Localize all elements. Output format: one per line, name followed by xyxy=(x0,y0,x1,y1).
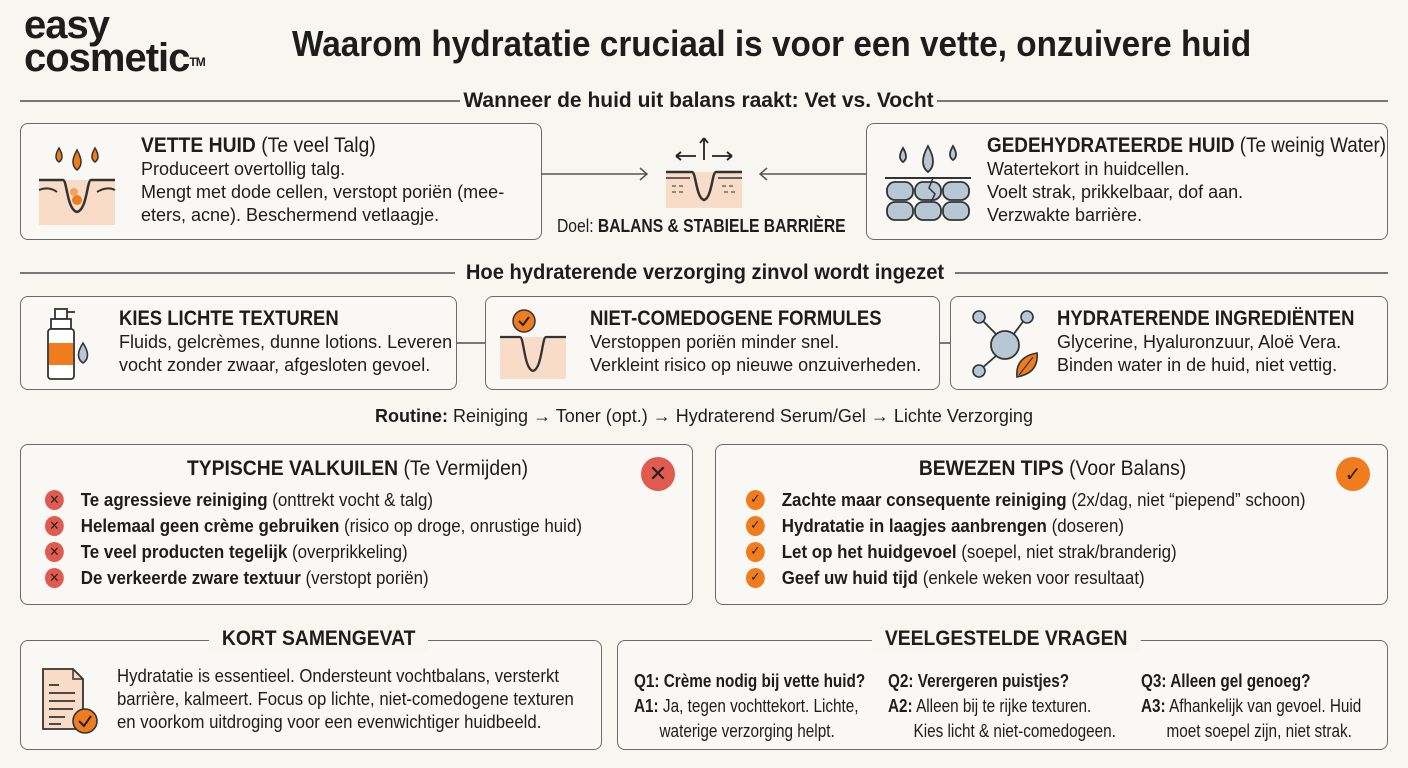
panel: vette huid xyxy=(20,123,542,240)
list: valkuilen: ✕ xyxy=(49,518,60,533)
list: valkuilen: Te veel producten tegelijk xyxy=(81,542,287,562)
list: valkuilen: ✕ xyxy=(49,492,60,507)
text: gedehydrateerde huid: Voelt strak, prikkelbaar, dof aan. xyxy=(987,182,1243,202)
icon: big check: ✓ xyxy=(1345,462,1361,486)
faq 2: A2: Alleen bij te rijke texturen. xyxy=(888,696,1091,716)
list: tips: Hydratatie in laagjes aanbrengen xyxy=(782,516,1047,536)
text: doel: Doel: BALANS & STABIELE BARRIÈRE xyxy=(557,216,846,236)
text: gedehydrateerde huid: Watertekort in huidcellen. xyxy=(987,159,1189,179)
list: tips: ✓ xyxy=(750,570,761,585)
heading: samengevat: KORT SAMENGEVAT xyxy=(222,627,415,650)
faq 2: Q2: Verergeren puistjes? xyxy=(888,671,1069,691)
icon: pore with check xyxy=(500,309,566,379)
faq 1: waterige verzorging helpt. xyxy=(660,721,835,741)
heading: valkuilen: TYPISCHE VALKUILEN (Te Vermijden) xyxy=(187,457,528,480)
text: vette huid xyxy=(141,134,504,225)
faq 3 xyxy=(1141,671,1361,741)
panel: tips xyxy=(715,444,1388,605)
faq 2: Kies licht & niet-comedogeen. xyxy=(914,721,1116,741)
heading: faq: VEELGESTELDE VRAGEN xyxy=(885,627,1128,650)
text: samenvatting: Hydratatie is essentieel. Ondersteunt vochtbalans, versterkt xyxy=(117,666,559,686)
list: valkuilen: Helemaal geen crème gebruiken xyxy=(81,516,339,536)
text: ingrediënten: Glycerine, Hyaluronzuur, Aloë Vera. xyxy=(1057,332,1341,352)
list: valkuilen xyxy=(45,490,582,588)
list: valkuilen: ✕ xyxy=(49,544,60,559)
faq 3: Q3: Alleen gel genoeg? xyxy=(1141,671,1310,691)
icon: dry skin cells xyxy=(885,144,971,221)
list: valkuilen: (risico op droge, onrustige huid) xyxy=(344,516,582,536)
list: valkuilen: (overprikkeling) xyxy=(292,542,408,562)
text: lichte texturen: vocht zonder zwaar, afgesloten gevoel. xyxy=(119,355,430,375)
list: valkuilen: ✕ xyxy=(49,570,60,585)
list: valkuilen: (verstopt poriën) xyxy=(305,568,429,588)
icon: bottle xyxy=(47,308,88,380)
list: valkuilen: De verkeerde zware textuur xyxy=(81,568,301,588)
text: vette huid: VETTE HUID (Te veel Talg) xyxy=(141,134,376,157)
list: tips: ✓ xyxy=(750,492,761,507)
text: ingrediënten: Binden water in de huid, niet vettig. xyxy=(1057,355,1337,375)
panel: veelgestelde vragen xyxy=(617,640,1388,750)
text: gedehydrateerde huid: GEDEHYDRATEERDE HUID (Te weinig Water) xyxy=(987,134,1386,157)
list: tips xyxy=(746,490,1306,588)
text: niet-comedogeen: Verkleint risico op nieuwe onzuiverheden. xyxy=(590,355,921,375)
panel: lichte texturen xyxy=(20,296,457,390)
faq 2 xyxy=(888,671,1116,741)
faq 3: A3: Afhankelijk van gevoel. Huid xyxy=(1141,696,1361,716)
list: tips: (enkele weken voor resultaat) xyxy=(923,568,1145,588)
section heading: verzorging: Hoe hydraterende verzorging zinvol wordt ingezet xyxy=(466,261,944,284)
section heading: balans: Wanneer de huid uit balans raakt: Vet vs. Vocht xyxy=(463,89,934,112)
text: lichte texturen: KIES LICHTE TEXTUREN xyxy=(119,307,339,330)
faq 3: moet soepel zijn, niet strak. xyxy=(1166,721,1352,741)
panel: hydraterende ingrediënten xyxy=(950,296,1388,390)
panel: gedehydrateerde huid xyxy=(866,123,1388,240)
text: niet-comedogeen: NIET-COMEDOGENE FORMULES xyxy=(590,307,882,330)
icon: document check xyxy=(42,668,98,734)
logo xyxy=(24,3,205,80)
panel: niet-comedogene formules xyxy=(485,296,940,390)
icon: oily pore xyxy=(38,146,116,225)
panel: kort samengevat xyxy=(20,640,602,750)
text: niet-comedogeen xyxy=(590,307,921,375)
faq 1: Q1: Crème nodig bij vette huid? xyxy=(634,671,865,691)
icon: molecule with leaf xyxy=(972,310,1038,378)
text: vette huid: Mengt met dode cellen, verstopt poriën (mee- xyxy=(141,182,504,202)
text: lichte texturen xyxy=(119,307,452,375)
logo: easy xyxy=(24,3,109,47)
list: tips: ✓ xyxy=(750,518,761,533)
faq 1: A1: Ja, tegen vochttekort. Lichte, xyxy=(634,696,859,716)
text: vette huid: eters, acne). Beschermend vetlaagje. xyxy=(141,205,439,225)
list: tips: Let op het huidgevoel xyxy=(782,542,957,562)
heading: tips: BEWEZEN TIPS (Voor Balans) xyxy=(919,457,1186,480)
text: lichte texturen: Fluids, gelcrèmes, dunne lotions. Leveren xyxy=(119,332,452,352)
title: Waarom hydratatie cruciaal is voor een vette, onzuivere huid xyxy=(292,23,1251,64)
list: valkuilen: Te agressieve reiniging xyxy=(81,490,268,510)
routine text: Routine: Reiniging → Toner (opt.) → Hydraterend Serum/Gel → Lichte Verzorging xyxy=(375,406,1033,426)
text: ingrediënten xyxy=(1057,307,1354,375)
faq 1 xyxy=(634,671,865,741)
text: samenvatting: barrière, kalmeert. Focus op lichte, niet-comedogene texturen xyxy=(117,689,574,709)
list: tips: Geef uw huid tijd xyxy=(782,568,918,588)
text: gedehydrateerde huid: Verzwakte barrière. xyxy=(987,205,1142,225)
text: ingrediënten: HYDRATERENDE INGREDIËNTEN xyxy=(1057,307,1354,330)
text: samenvatting xyxy=(117,666,574,732)
list: tips: ✓ xyxy=(750,544,761,559)
arrow: right to center xyxy=(759,168,866,180)
text: vette huid: Produceert overtollig talg. xyxy=(141,159,345,179)
text: gedehydrateerde huid xyxy=(987,134,1386,225)
arrow: left to center xyxy=(541,168,648,180)
list: tips: Zachte maar consequente reiniging xyxy=(782,490,1067,510)
icon: big x xyxy=(641,457,675,491)
logo: cosmeticTM xyxy=(24,36,205,80)
icon: big check xyxy=(1336,457,1370,491)
list: tips: (2x/dag, niet “piepend” schoon) xyxy=(1071,490,1306,510)
text: niet-comedogeen: Verstoppen poriën minder snel. xyxy=(590,332,839,352)
list: valkuilen: (onttrekt vocht & talg) xyxy=(272,490,433,510)
icon: big x: ✕ xyxy=(649,461,667,486)
text: samenvatting: en voorkom uitdroging voor een evenwichtiger huidbeeld. xyxy=(117,712,541,732)
list: tips: (soepel, niet strak/branderig) xyxy=(961,542,1177,562)
icon: balanced skin xyxy=(666,138,742,208)
list: tips: (doseren) xyxy=(1052,516,1124,536)
panel: valkuilen xyxy=(20,444,693,605)
